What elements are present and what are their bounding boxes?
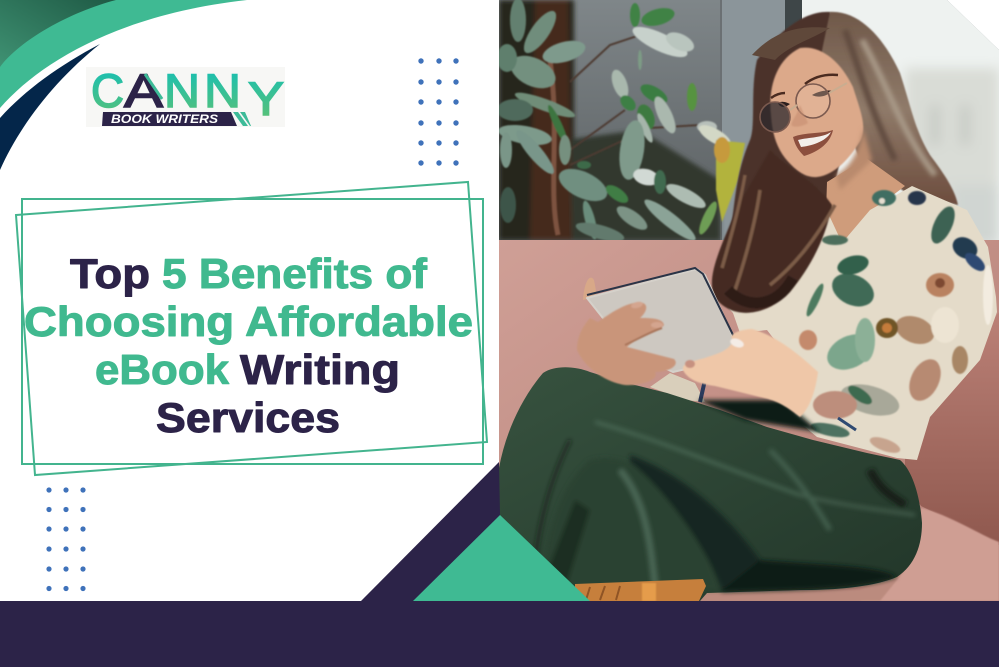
logo wordmark	[91, 64, 284, 125]
trousers	[499, 367, 922, 601]
logo	[86, 64, 285, 127]
nose	[792, 105, 808, 127]
dot grid: top	[418, 58, 459, 166]
window background	[499, 0, 999, 240]
hair, front curls	[712, 150, 835, 313]
logo subtitle: BOOK WRITERS	[111, 112, 218, 126]
logo wordmark: N	[164, 64, 200, 117]
title: Top	[70, 250, 150, 297]
navy triangle	[361, 462, 500, 601]
trouser shading and folds	[535, 400, 915, 592]
logo wordmark: A	[124, 64, 164, 117]
title frame: tilted rectangle	[16, 182, 487, 475]
green triangle	[413, 515, 590, 601]
thumb behind tablet	[583, 278, 597, 300]
bottom band	[0, 601, 999, 667]
corner swoosh: green	[0, 0, 247, 108]
title frame: straight rectangle	[22, 199, 483, 464]
eyes	[778, 90, 832, 107]
hands	[577, 301, 818, 417]
plant	[497, 0, 745, 245]
logo wordmark: Y	[248, 72, 284, 125]
title: Choosing Affordable	[24, 298, 473, 345]
hair, back	[731, 10, 959, 222]
blouse floral print	[799, 190, 993, 456]
sofa	[499, 240, 999, 601]
logo wordmark: C	[91, 64, 124, 117]
blouse	[650, 186, 997, 460]
logo banner	[102, 112, 237, 126]
title: eBook	[95, 346, 230, 393]
wooden table	[575, 579, 706, 601]
logo wordmark: N	[204, 64, 241, 117]
logo banner stripes	[233, 112, 251, 126]
dot grid: bottom	[46, 487, 86, 591]
eyebrows	[771, 75, 838, 98]
corner swoosh: dark green	[0, 0, 116, 67]
photo: woman reading a tablet on a pink sofa	[497, 0, 999, 601]
face and neck	[760, 48, 905, 244]
title	[24, 250, 473, 441]
title: Services	[156, 394, 340, 441]
title: Writing	[240, 346, 400, 393]
logo book spine	[145, 74, 162, 99]
glasses	[760, 83, 847, 132]
tablet	[587, 268, 742, 372]
corner swoosh: navy	[0, 44, 100, 170]
smiling mouth	[793, 130, 833, 156]
title: 5 Benefits of	[162, 250, 428, 297]
